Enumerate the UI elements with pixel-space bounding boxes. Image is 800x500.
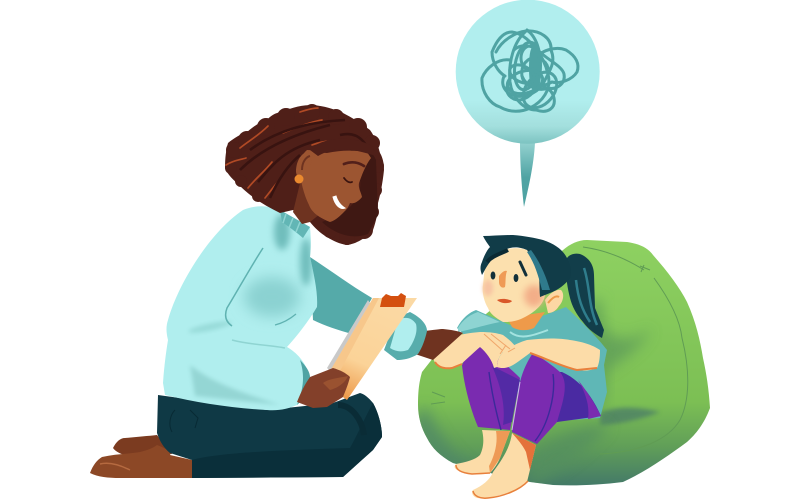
girl left leg and foot <box>455 430 510 474</box>
woman closed eye <box>344 178 352 182</box>
girl ear <box>545 290 563 313</box>
girl mouth <box>497 299 512 303</box>
woman smile <box>333 196 345 208</box>
woman earring <box>294 174 304 184</box>
girl nose <box>499 271 507 288</box>
woman far sleeve <box>310 257 372 334</box>
woman far hand <box>415 329 463 360</box>
bubble circle <box>456 0 600 144</box>
sweater creases <box>226 248 263 326</box>
bean bag <box>412 240 710 490</box>
woman near hand <box>297 368 350 408</box>
girl purple pants <box>462 347 601 444</box>
hair over forehead <box>310 139 376 156</box>
hair behind right face <box>322 147 378 236</box>
girl t-shirt <box>457 307 607 422</box>
thought bubble with scribble <box>456 0 600 207</box>
woman face <box>300 150 371 222</box>
hair highlights <box>226 108 335 198</box>
girl hair <box>480 235 571 297</box>
woman front foot <box>90 445 192 478</box>
woman back foot <box>113 435 172 456</box>
woman sweater <box>163 206 317 410</box>
woman clipboard <box>323 293 417 400</box>
bubble tail <box>520 142 535 207</box>
woman hair <box>225 104 384 245</box>
clipboard clip <box>380 293 406 307</box>
woman ear <box>296 151 314 179</box>
bag seams <box>431 247 688 454</box>
girl <box>433 235 607 498</box>
girl eyes <box>491 272 495 280</box>
woman jeans <box>157 393 382 478</box>
woman far cuff <box>384 312 427 360</box>
girl eyebrow <box>520 262 526 275</box>
girl right leg and foot <box>472 433 536 498</box>
girl ponytail <box>566 254 604 338</box>
girl arms and hands <box>497 338 600 371</box>
girl neck <box>507 312 545 330</box>
woman <box>90 104 463 478</box>
bag shadow folds <box>601 330 648 371</box>
woman neck <box>293 175 325 224</box>
woman eyebrow <box>344 162 364 166</box>
girl face <box>483 248 545 322</box>
tangled scribble <box>482 30 578 114</box>
illustration: counsellor with child on bean bag <box>90 0 710 499</box>
sweater collar <box>280 210 310 238</box>
